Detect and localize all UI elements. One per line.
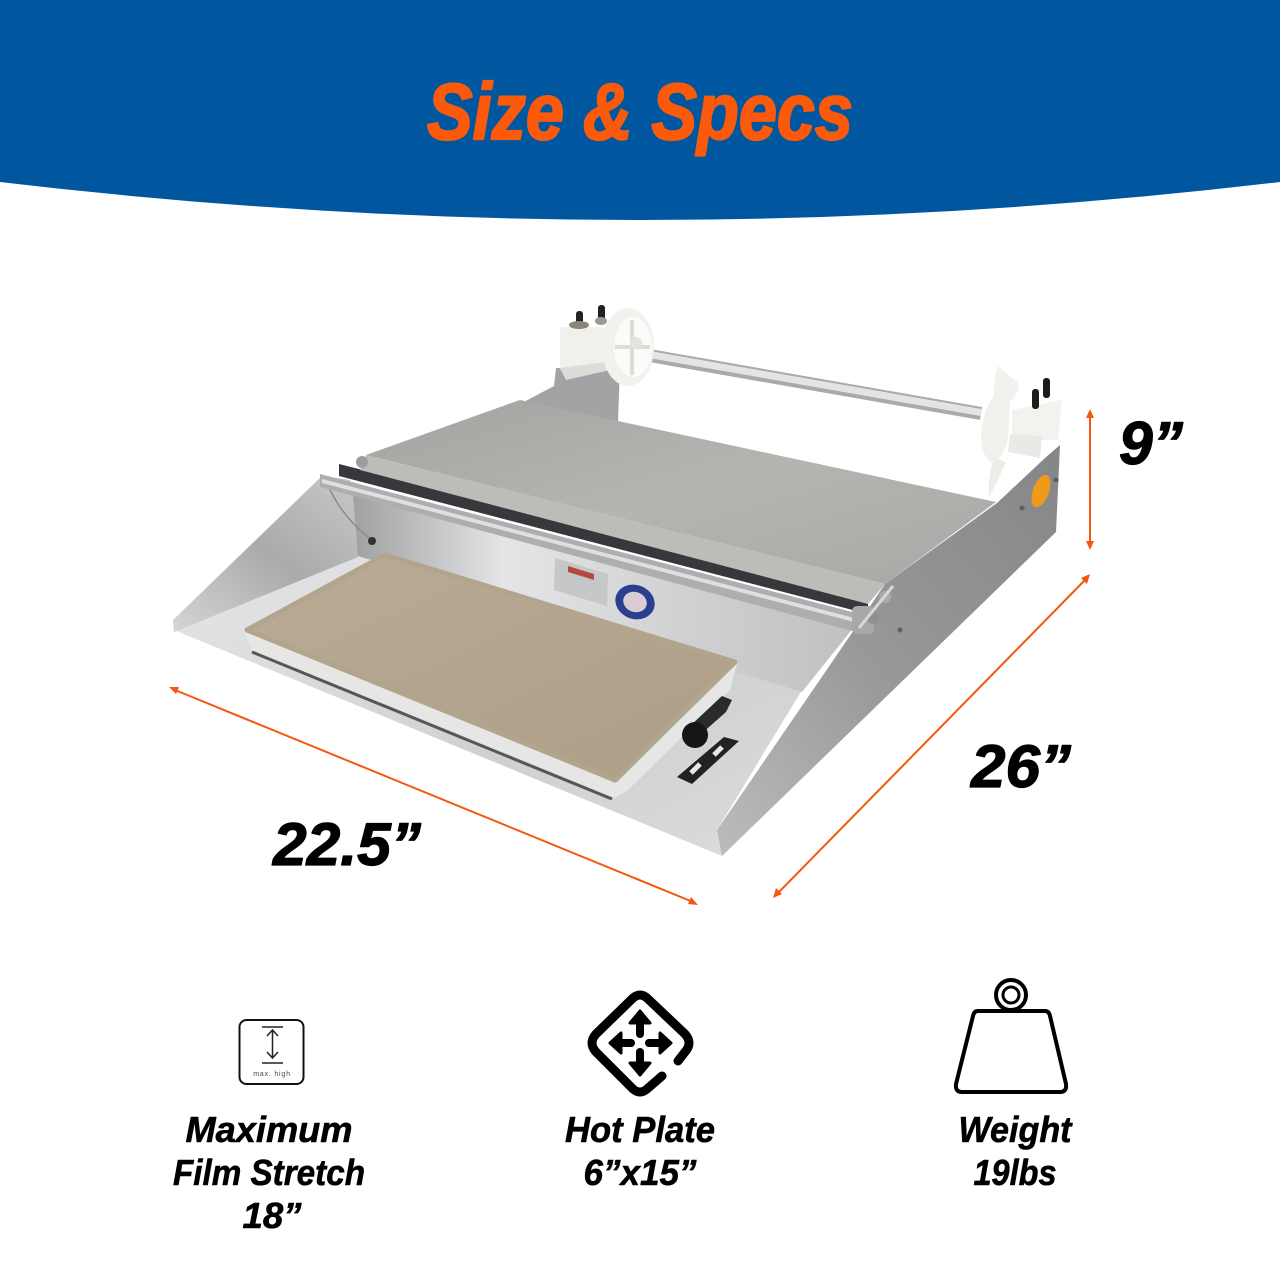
text: weight [958,1109,1073,1193]
label red strip [568,566,594,580]
black sealing bar [339,464,868,614]
product photo: wrapping machine [173,305,1062,856]
left side wing [173,476,368,632]
right side panel [717,445,1060,856]
back wall [352,482,858,692]
dimension label: 22.5 inches: 22.5” [272,811,421,878]
text: hot plate [565,1109,715,1193]
data label [554,558,608,606]
text: maximum film stretch: 18” [242,1195,302,1236]
hot plate base [243,630,738,798]
icon: maximum height: max. high [253,1071,291,1078]
left mounting bracket [520,305,620,422]
floor tray [174,552,802,856]
film roll rod [638,352,981,414]
text: weight: Weight [958,1109,1073,1150]
rail end fittings [330,456,893,634]
text: maximum film stretch [173,1109,365,1236]
USA badge centre [620,588,650,616]
control knob [682,696,732,748]
dimension arrow: depth [773,574,1090,898]
icon: maximum height [240,1020,304,1084]
side panel rivets [900,480,1056,630]
text: weight: 19lbs [974,1152,1056,1193]
icon: hot plate arrows [592,995,689,1092]
dimension label: 26 inches: 26” [970,733,1071,800]
title: Size & Specs [427,67,853,156]
text: maximum film stretch: Maximum [186,1109,352,1150]
front rail [320,474,860,632]
right roll holder and bracket [981,366,1062,498]
header banner [0,0,1280,220]
hot plate cover [247,555,735,780]
text: hot plate: Hot Plate [565,1109,715,1150]
icon: weight [956,980,1066,1092]
text: maximum film stretch: Film Stretch [173,1152,365,1193]
HI LO switch plate [677,737,739,784]
top plate [366,400,996,584]
dimension label: 9 inches: 9” [1119,410,1183,477]
switch arrows [691,747,722,773]
text: hot plate: 6”x15” [584,1152,696,1193]
orange sticker [1028,472,1054,510]
left roll holder wheel [602,308,654,386]
top plate front lip [360,455,885,604]
dimension arrow: height [1086,409,1094,550]
USA badge [610,579,660,625]
dimension arrow: width [169,687,698,905]
